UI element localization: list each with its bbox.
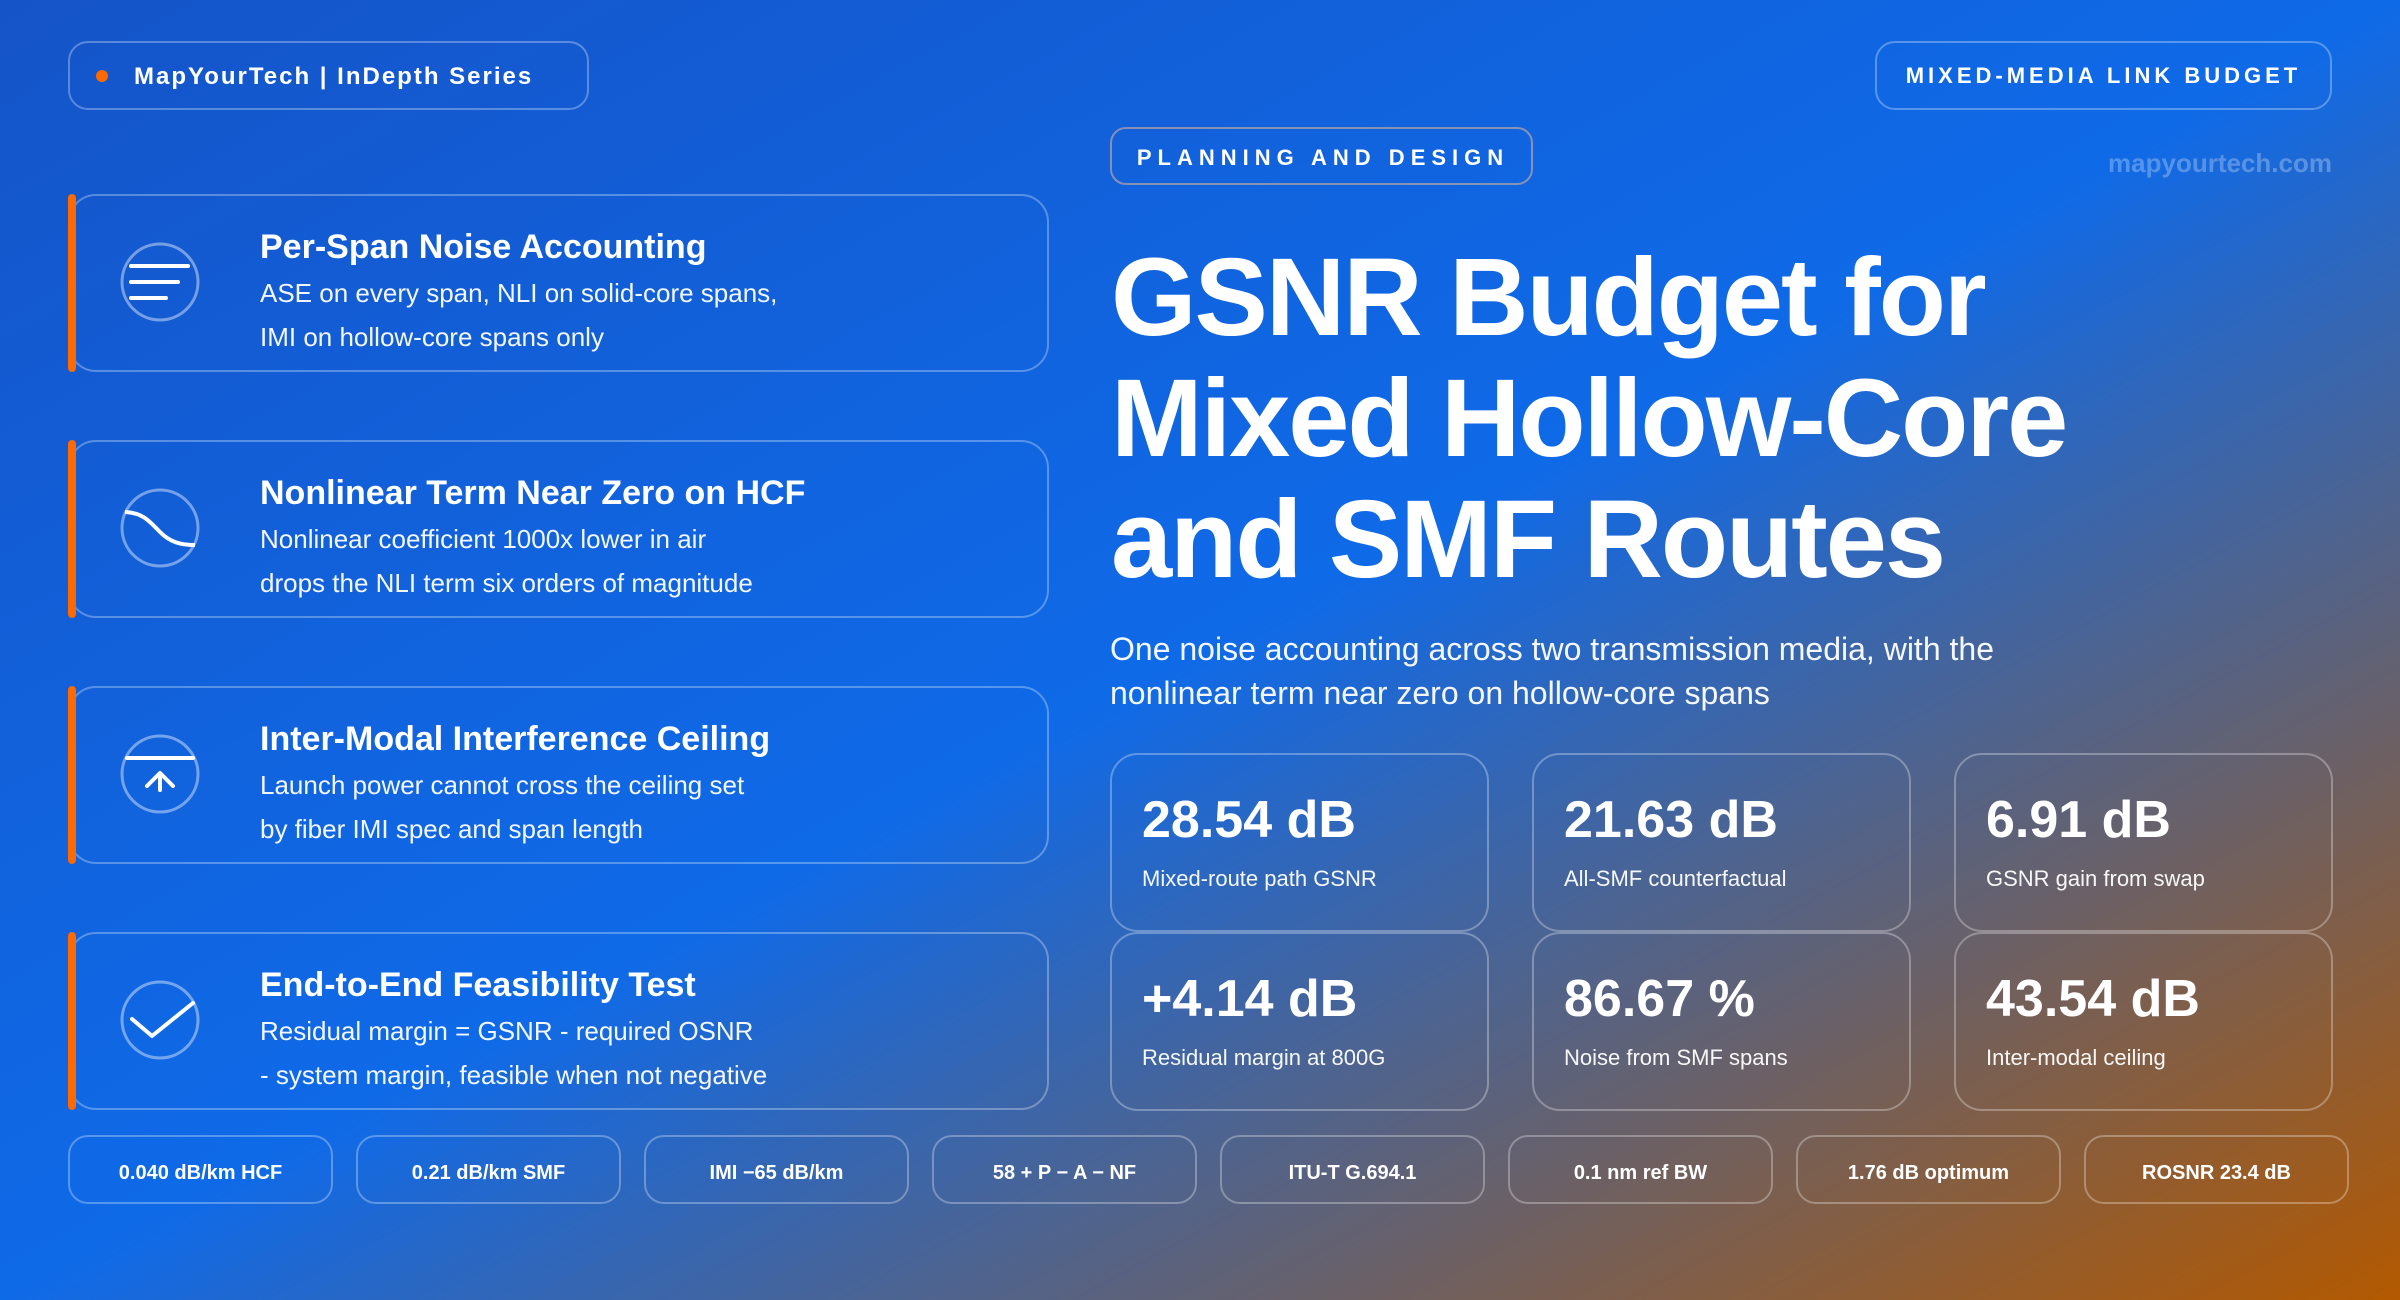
topic badge bbox=[1875, 41, 2332, 110]
stat: margin bbox=[1110, 932, 1489, 1111]
card text: drops the NLI term six orders of magnitude bbox=[260, 568, 753, 598]
card text bbox=[260, 278, 777, 352]
card text: by fiber IMI spec and span length bbox=[260, 814, 643, 844]
category badge: PLANNING AND DESIGN bbox=[1137, 145, 1509, 170]
title: GSNR Budget for bbox=[1111, 236, 1985, 359]
stat: ceiling bbox=[1954, 932, 2333, 1111]
title: and SMF Routes bbox=[1111, 478, 1944, 601]
chip: reference bandwidth bbox=[1508, 1135, 1773, 1204]
icon: ceiling with arrow bbox=[120, 734, 200, 814]
card text: Launch power cannot cross the ceiling set bbox=[260, 770, 744, 800]
chip: ROSNR bbox=[2084, 1135, 2349, 1204]
brand text: MapYourTech | InDepth Series bbox=[134, 63, 533, 90]
card text bbox=[260, 770, 744, 844]
card text: ASE on every span, NLI on solid-core spans, bbox=[260, 278, 777, 308]
stat: ceiling: 43.54 dB bbox=[1986, 970, 2200, 1028]
icon: check mark bbox=[120, 980, 200, 1060]
topic badge: MIXED-MEDIA LINK BUDGET bbox=[1906, 63, 2301, 88]
stat: all-SMF bbox=[1532, 753, 1911, 932]
category badge bbox=[1110, 127, 1533, 185]
stat: margin: +4.14 dB bbox=[1142, 970, 1357, 1028]
stat: noise share: Noise from SMF spans bbox=[1564, 1045, 1788, 1070]
chip: IMI bbox=[644, 1135, 909, 1204]
stat: gain: 6.91 dB bbox=[1986, 791, 2171, 849]
card text: IMI on hollow-core spans only bbox=[260, 322, 604, 352]
chip: HCF loss bbox=[68, 1135, 333, 1204]
chip: standard bbox=[1220, 1135, 1485, 1204]
stat: noise share bbox=[1532, 932, 1911, 1111]
chip: reference bandwidth: 0.1 nm ref BW bbox=[1574, 1162, 1707, 1184]
icon: decaying curve bbox=[120, 488, 200, 568]
panel: inter-modal ceiling bbox=[68, 686, 1049, 864]
website label: mapyourtech.com bbox=[2108, 148, 2332, 178]
stat: gain bbox=[1954, 753, 2333, 932]
chip: SMF loss bbox=[356, 1135, 621, 1204]
brand dot bbox=[96, 70, 108, 82]
card heading: Per-Span Noise Accounting bbox=[260, 228, 706, 266]
stat: all-SMF: All-SMF counterfactual bbox=[1564, 866, 1787, 891]
chip: formula: 58 + P − A − NF bbox=[993, 1162, 1136, 1184]
panel: nonlinear term bbox=[68, 440, 1049, 618]
brand badge bbox=[68, 41, 589, 110]
chip: SMF loss: 0.21 dB/km SMF bbox=[412, 1162, 565, 1184]
stat: path GSNR: Mixed-route path GSNR bbox=[1142, 866, 1377, 891]
stat: gain: GSNR gain from swap bbox=[1986, 866, 2205, 891]
card text bbox=[260, 1016, 767, 1090]
card heading: Inter-Modal Interference Ceiling bbox=[260, 720, 770, 758]
card heading: Nonlinear Term Near Zero on HCF bbox=[260, 474, 805, 512]
chip: HCF loss: 0.040 dB/km HCF bbox=[119, 1162, 282, 1184]
stat: path GSNR bbox=[1110, 753, 1489, 932]
card text: Nonlinear coefficient 1000x lower in air bbox=[260, 524, 706, 554]
subtitle: One noise accounting across two transmission media, with the bbox=[1110, 631, 1994, 667]
card text: Residual margin = GSNR - required OSNR bbox=[260, 1016, 753, 1046]
chip: optimum bbox=[1796, 1135, 2061, 1204]
panel: feasibility test bbox=[68, 932, 1049, 1110]
subtitle: nonlinear term near zero on hollow-core spans bbox=[1110, 675, 1770, 711]
stat: all-SMF: 21.63 dB bbox=[1564, 791, 1778, 849]
stat: ceiling: Inter-modal ceiling bbox=[1986, 1045, 2166, 1070]
card text bbox=[260, 524, 753, 598]
icon: noise lines bbox=[120, 242, 200, 322]
stat: margin: Residual margin at 800G bbox=[1142, 1045, 1385, 1070]
chip: formula bbox=[932, 1135, 1197, 1204]
title: Mixed Hollow-Core bbox=[1111, 357, 2066, 480]
panel: per-span noise accounting bbox=[68, 194, 1049, 372]
chip: optimum: 1.76 dB optimum bbox=[1848, 1162, 2009, 1184]
title bbox=[1111, 236, 2066, 601]
stat: path GSNR: 28.54 dB bbox=[1142, 791, 1356, 849]
chip: IMI: IMI −65 dB/km bbox=[710, 1162, 843, 1184]
stat: noise share: 86.67 % bbox=[1564, 970, 1755, 1028]
subtitle bbox=[1110, 631, 1994, 711]
card heading: End-to-End Feasibility Test bbox=[260, 966, 696, 1004]
card text: - system margin, feasible when not negative bbox=[260, 1060, 767, 1090]
chip: standard: ITU-T G.694.1 bbox=[1289, 1162, 1416, 1184]
chip: ROSNR: ROSNR 23.4 dB bbox=[2142, 1162, 2291, 1184]
